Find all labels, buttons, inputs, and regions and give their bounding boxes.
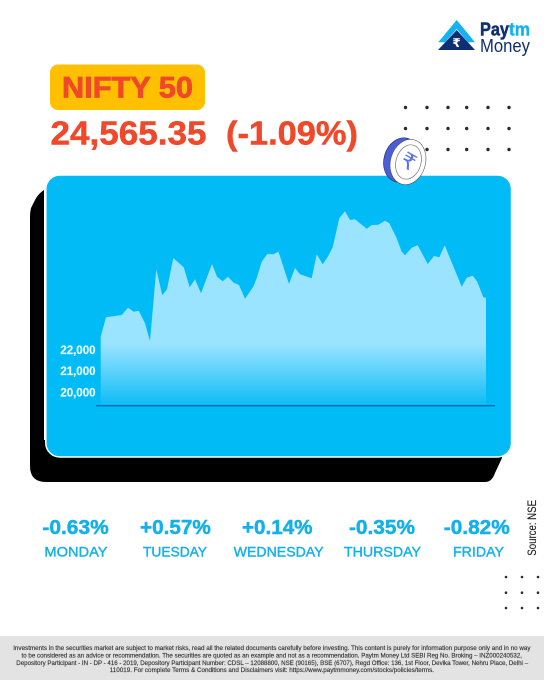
footer disclaimer [0,636,544,680]
Wednesday: WEDNESDAY [234,544,324,560]
logo: Paytm Money: tm [509,20,530,40]
source note: Source: NSE [525,500,539,556]
Wednesday: +0.14% [242,516,312,539]
logo: Paytm Money: Money [480,35,531,56]
index value and change [50,116,358,152]
Wednesday [234,516,324,560]
Thursday: THURSDAY [344,544,422,560]
title badge: NIFTY 50: NIFTY 50 [62,71,193,104]
panel shadow [30,190,502,482]
title badge: NIFTY 50 [50,64,205,110]
footer disclaimer: 110019. For complete Terms & Conditions and Disclaimers visit: https://www.paytmmoney.com/stocks/policies/terms. [110,667,434,674]
dot grid top right [404,106,511,151]
chart baseline [96,405,495,406]
Friday: FRIDAY [453,544,505,560]
icon: rupee coin: ₹ [395,148,420,177]
Tuesday [140,516,211,560]
logo: Paytm Money: Pay [480,20,510,40]
index value and change: 24,565.35 [50,116,207,152]
y-axis labels [60,345,96,400]
y-axis labels: 21,000 [60,366,96,378]
daily changes [42,516,510,560]
Monday: MONDAY [44,544,108,560]
Monday [42,516,109,560]
Friday: -0.82% [444,516,510,539]
logo: Paytm Money [438,20,531,56]
area chart [101,211,486,405]
dot grid bottom right [505,576,539,609]
y-axis labels: 22,000 [60,345,96,357]
icon: rupee coin [378,134,431,189]
panel: chart [46,175,512,457]
logo: Paytm Money: ₹ [452,36,461,50]
Friday [444,516,510,560]
index value and change: (-1.09%) [226,116,358,152]
Thursday: -0.35% [349,516,415,539]
Tuesday: +0.57% [140,516,211,539]
Monday: -0.63% [42,516,109,539]
y-axis labels: 20,000 [60,388,96,400]
Thursday [344,516,422,560]
Tuesday: TUESDAY [143,544,208,560]
